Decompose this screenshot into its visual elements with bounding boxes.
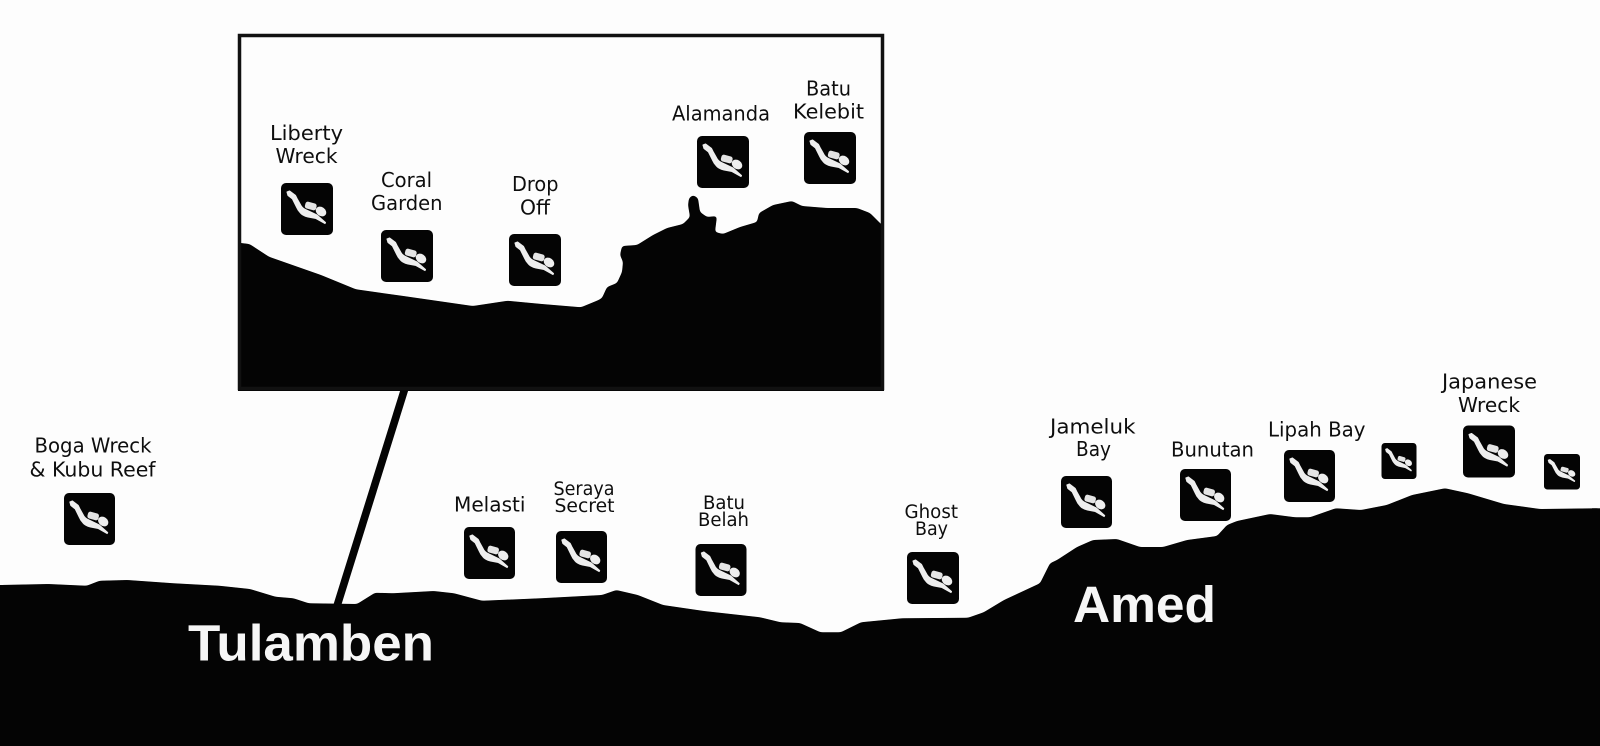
site: Liberty Wreck (270, 121, 343, 235)
site: Boga Wreck and Kubu Reef (30, 434, 156, 545)
site: Drop Off: Drop (512, 172, 558, 196)
site: Coral Garden: Coral (381, 168, 432, 192)
site: Batu Belah: Batu (703, 493, 745, 514)
site: Drop Off: Off (520, 196, 551, 220)
connector line from inset to Tulamben (333, 388, 409, 606)
site: Alamanda (672, 102, 770, 188)
site: Jameluk Bay (1048, 414, 1136, 528)
site: Ghost Bay: Ghost (904, 502, 958, 523)
site: Seraya Secret (554, 479, 614, 583)
site: Japanese Wreck (1440, 370, 1537, 478)
site: Bunutan (1171, 438, 1254, 521)
site: Alamanda: Alamanda (672, 102, 770, 126)
site: Coral Garden (371, 168, 442, 282)
site: Lipah Bay (1268, 418, 1366, 502)
inset coastline silhouette (238, 196, 884, 391)
site: Melasti (454, 492, 526, 579)
site: Bunutan: Bunutan (1171, 438, 1254, 462)
site: Ghost Bay: Bay (915, 519, 948, 540)
site: Liberty Wreck: Liberty (270, 121, 343, 145)
site: Seraya Secret: Seraya (554, 479, 614, 500)
site: Ghost Bay (904, 502, 959, 604)
site: Batu Kelebit: Batu (806, 76, 851, 100)
site: Liberty Wreck: Wreck (276, 144, 338, 168)
site: Japanese Wreck: Wreck (1458, 393, 1520, 417)
site: Batu Kelebit: Kelebit (793, 100, 864, 124)
site: Jameluk Bay: Bay (1076, 437, 1111, 461)
site: Batu Belah (696, 493, 749, 596)
site: Japanese Wreck: Japanese (1440, 370, 1537, 394)
site: Drop Off (509, 172, 561, 286)
panel: inset map of Tulamben (220, 36, 900, 410)
site: Boga Wreck and Kubu Reef: & Kubu Reef (30, 458, 156, 482)
heading: Tulamben: Tulamben (188, 614, 434, 672)
site: Jameluk Bay: Jameluk (1048, 414, 1136, 438)
icon: unnamed dive site far east (1544, 454, 1580, 490)
site: Boga Wreck and Kubu Reef: Boga Wreck (34, 434, 152, 458)
site: Batu Belah: Belah (698, 510, 749, 531)
site: Seraya Secret: Secret (554, 496, 614, 517)
inset frame (240, 36, 882, 388)
heading: Amed: Amed (1073, 576, 1216, 633)
site: Coral Garden: Garden (371, 191, 442, 215)
main coastline silhouette (0, 488, 1600, 746)
site: Melasti: Melasti (454, 492, 526, 516)
icon: unnamed dive site (1382, 443, 1416, 479)
site: Lipah Bay: Lipah Bay (1268, 418, 1366, 442)
site: Batu Kelebit (793, 76, 864, 184)
